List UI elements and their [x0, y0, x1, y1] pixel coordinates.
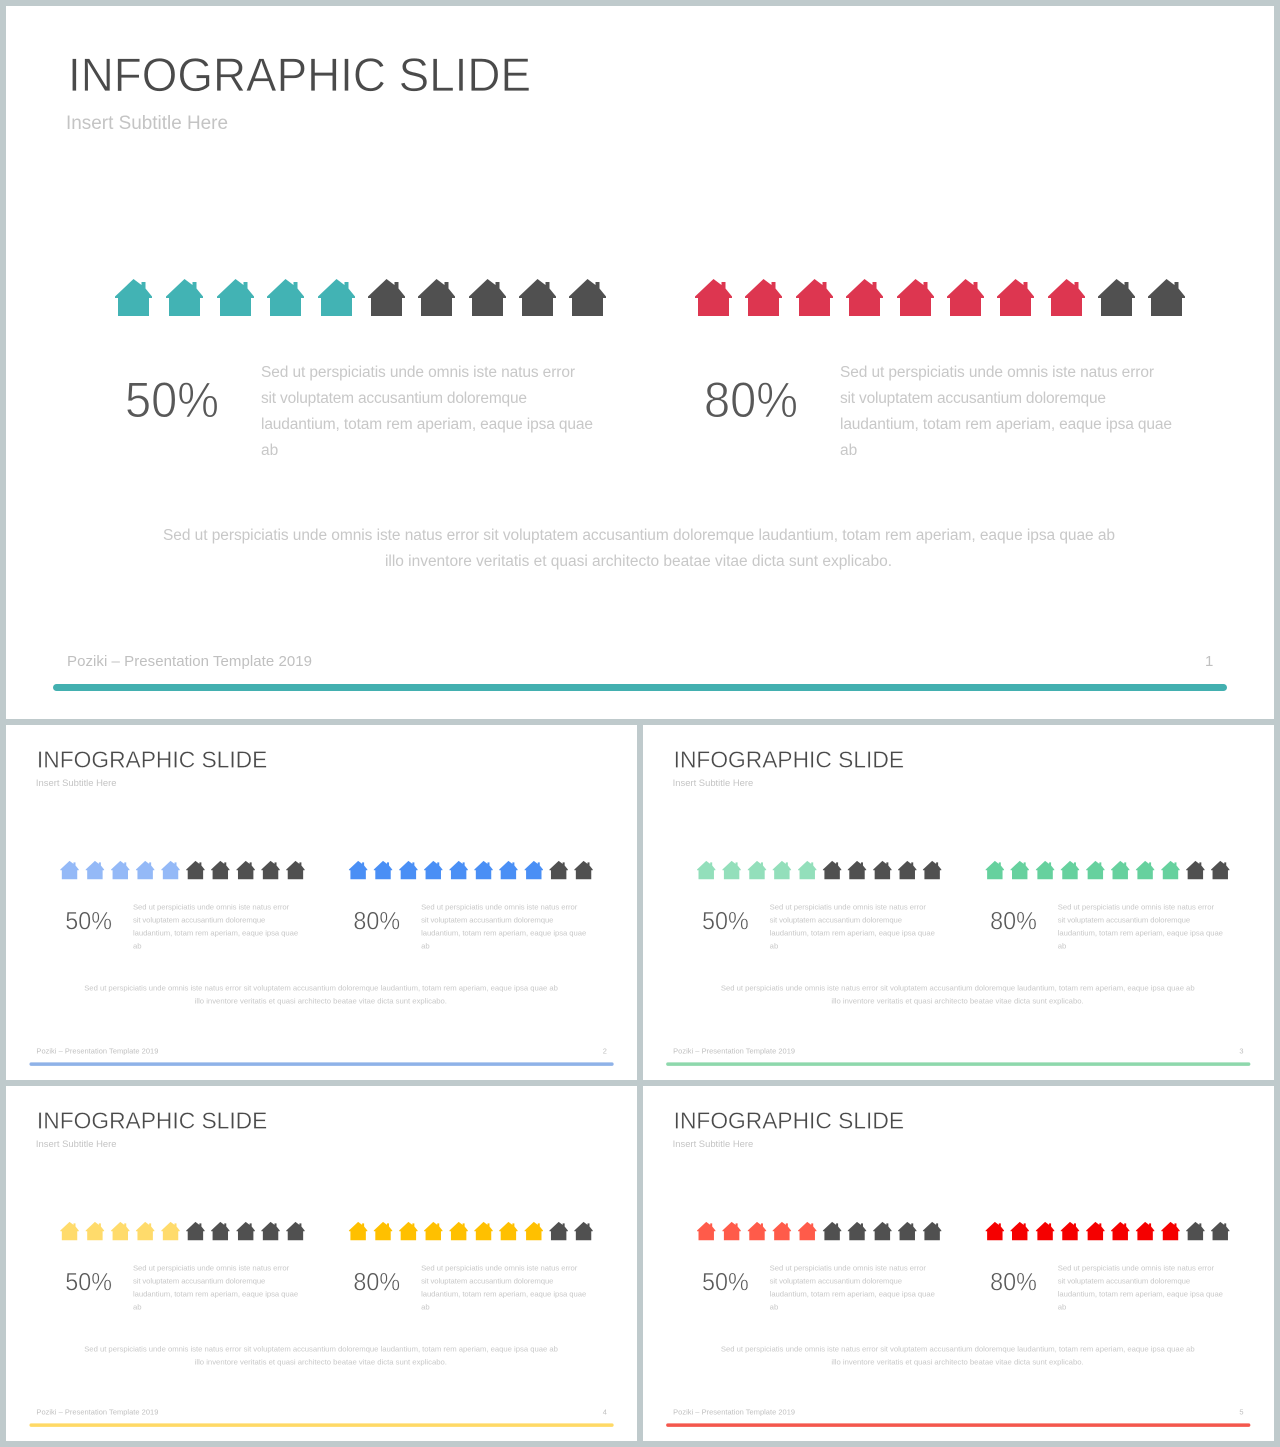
title: INFOGRAPHIC SLIDE	[68, 48, 531, 101]
panel: slide 5 (red)	[643, 1086, 1274, 1441]
footer text: Poziki – Presentation Template 2019	[673, 1407, 795, 1416]
text block: centered summary	[163, 527, 1115, 570]
text block: right description: Sed ut perspiciatis unde omnis iste natus error	[1058, 1264, 1214, 1273]
text block: right description: ab	[1058, 1302, 1066, 1311]
page number: 5	[1239, 1407, 1244, 1416]
text block: centered summary	[84, 1345, 558, 1367]
text block: right description: ab	[421, 1302, 430, 1311]
text block: left description: laudantium, totam rem aperiam, eaque ipsa quae	[133, 928, 298, 937]
icon row: 50 percent houses	[60, 1222, 305, 1240]
icon row: 80 percent houses	[986, 861, 1229, 879]
text block: right description	[421, 903, 586, 950]
text block: right description: laudantium, totam rem aperiam, eaque ipsa quae	[1058, 928, 1223, 937]
panel: slide 1 (teal and crimson)	[6, 6, 1274, 719]
subtitle: Insert Subtitle Here	[673, 1139, 753, 1150]
panel: slide 2 (blue)	[6, 725, 637, 1080]
page number: 2	[603, 1046, 607, 1055]
icon row: 80 percent houses	[695, 279, 1185, 316]
statistic: 80%: 80%	[990, 907, 1037, 935]
text block: right description: sit voluptatem accusantium doloremque	[840, 390, 1106, 407]
text block: left description: ab	[770, 1302, 778, 1311]
text block: left description: sit voluptatem accusantium doloremque	[261, 390, 527, 407]
statistic: 80%: 80%	[353, 1268, 400, 1296]
footer text: Poziki – Presentation Template 2019	[673, 1046, 795, 1055]
text block: right description: ab	[421, 941, 430, 950]
text block: right description: Sed ut perspiciatis unde omnis iste natus error	[840, 364, 1154, 381]
text block: left description: ab	[261, 442, 278, 459]
text block: right description: sit voluptatem accusantium doloremque	[1058, 916, 1190, 925]
footer text: Poziki – Presentation Template 2019	[67, 653, 312, 670]
subtitle: Insert Subtitle Here	[36, 778, 117, 789]
text block: centered summary	[721, 984, 1195, 1006]
footer text: Poziki – Presentation Template 2019	[36, 1407, 158, 1416]
text block: right description: Sed ut perspiciatis unde omnis iste natus error	[1058, 903, 1214, 912]
text block: right description: laudantium, totam rem aperiam, eaque ipsa quae	[1058, 1289, 1223, 1298]
text block: left description: sit voluptatem accusantium doloremque	[133, 1277, 265, 1286]
text block: centered summary: illo inventore veritatis et quasi architecto beatae vitae dicta sunt explicabo.	[831, 1358, 1084, 1367]
text block: left description: sit voluptatem accusantium doloremque	[770, 916, 902, 925]
title: INFOGRAPHIC SLIDE	[37, 746, 267, 772]
panel: slide 3 (green)	[643, 725, 1274, 1080]
text block: right description: laudantium, totam rem aperiam, eaque ipsa quae	[421, 928, 586, 937]
text block: left description: ab	[770, 941, 778, 950]
icon row: 50 percent houses	[697, 1222, 941, 1240]
panel: slide 4 (yellow)	[6, 1086, 637, 1441]
statistic: 50%: 50%	[702, 1268, 749, 1296]
title: INFOGRAPHIC SLIDE	[674, 1107, 904, 1133]
statistic: 80%: 80%	[353, 907, 400, 935]
text block: left description: Sed ut perspiciatis unde omnis iste natus error	[133, 903, 290, 912]
icon row: 80 percent houses	[349, 1222, 593, 1240]
icon row: 50 percent houses	[60, 861, 305, 879]
title: INFOGRAPHIC SLIDE	[674, 746, 904, 772]
text block: centered summary: Sed ut perspiciatis unde omnis iste natus error sit voluptatem accusantium doloremque laudantium, totam rem aperiam, eaque ipsa quae ab	[721, 1345, 1195, 1354]
page number: 4	[603, 1407, 607, 1416]
text block: right description: sit voluptatem accusantium doloremque	[421, 1277, 553, 1286]
text block: left description: Sed ut perspiciatis unde omnis iste natus error	[770, 903, 926, 912]
text block: left description: sit voluptatem accusantium doloremque	[770, 1277, 902, 1286]
text block: right description: sit voluptatem accusantium doloremque	[421, 916, 553, 925]
text block: left description: Sed ut perspiciatis unde omnis iste natus error	[133, 1264, 290, 1273]
icon row: 80 percent houses	[986, 1222, 1229, 1240]
text block: centered summary: illo inventore veritatis et quasi architecto beatae vitae dicta sunt explicabo.	[195, 997, 447, 1006]
text block: centered summary: illo inventore veritatis et quasi architecto beatae vitae dicta sunt explicabo.	[385, 553, 892, 570]
footer bar	[53, 684, 1227, 691]
text block: left description: laudantium, totam rem aperiam, eaque ipsa quae	[770, 1289, 935, 1298]
text block: left description: laudantium, totam rem aperiam, eaque ipsa quae	[770, 928, 935, 937]
statistic: 80%: 80%	[990, 1268, 1037, 1296]
icon row: 80 percent houses	[349, 861, 593, 879]
statistic: 50%: 50%	[125, 372, 219, 428]
text block: right description: Sed ut perspiciatis unde omnis iste natus error	[421, 1264, 578, 1273]
statistic: 80%: 80%	[704, 372, 798, 428]
text block: left description	[770, 903, 935, 950]
text block: centered summary: illo inventore veritatis et quasi architecto beatae vitae dicta sunt explicabo.	[831, 997, 1084, 1006]
text block: left description	[261, 364, 593, 459]
text block: left description: Sed ut perspiciatis unde omnis iste natus error	[770, 1264, 926, 1273]
statistic: 50%: 50%	[702, 907, 749, 935]
text block: left description: laudantium, totam rem aperiam, eaque ipsa quae	[133, 1289, 298, 1298]
text block: right description: laudantium, totam rem aperiam, eaque ipsa quae	[840, 416, 1172, 433]
page number: 3	[1239, 1046, 1244, 1055]
text block: right description: sit voluptatem accusantium doloremque	[1058, 1277, 1190, 1286]
subtitle: Insert Subtitle Here	[36, 1139, 117, 1150]
footer text: Poziki – Presentation Template 2019	[36, 1046, 158, 1055]
title: INFOGRAPHIC SLIDE	[37, 1107, 267, 1133]
footer bar	[666, 1062, 1250, 1066]
subtitle: Insert Subtitle Here	[66, 113, 228, 134]
text block: left description: Sed ut perspiciatis unde omnis iste natus error	[261, 364, 575, 381]
text block: left description: laudantium, totam rem aperiam, eaque ipsa quae	[261, 416, 593, 433]
text block: right description: Sed ut perspiciatis unde omnis iste natus error	[421, 903, 578, 912]
text block: centered summary	[721, 1345, 1195, 1367]
text block: right description	[1058, 903, 1223, 950]
text block: right description	[421, 1264, 586, 1311]
text block: left description	[133, 1264, 298, 1311]
text block: centered summary: illo inventore veritatis et quasi architecto beatae vitae dicta sunt explicabo.	[195, 1358, 447, 1367]
text block: left description	[770, 1264, 935, 1311]
subtitle: Insert Subtitle Here	[673, 778, 753, 789]
text block: centered summary: Sed ut perspiciatis unde omnis iste natus error sit voluptatem accusantium doloremque laudantium, totam rem aperiam, eaque ipsa quae ab	[84, 1345, 558, 1354]
footer bar	[29, 1062, 614, 1066]
footer bar	[29, 1423, 614, 1427]
page number: 1	[1205, 653, 1213, 670]
text block: right description	[840, 364, 1172, 459]
icon row: 50 percent houses	[697, 861, 941, 879]
text block: centered summary: Sed ut perspiciatis unde omnis iste natus error sit voluptatem accusantium doloremque laudantium, totam rem aperiam, eaque ipsa quae ab	[84, 984, 558, 993]
text block: right description	[1058, 1264, 1223, 1311]
text block: right description: laudantium, totam rem aperiam, eaque ipsa quae	[421, 1289, 586, 1298]
text block: left description: ab	[133, 941, 142, 950]
text block: centered summary: Sed ut perspiciatis unde omnis iste natus error sit voluptatem accusantium doloremque laudantium, totam rem aperiam, eaque ipsa quae ab	[721, 984, 1195, 993]
icon row: 50 percent houses	[115, 279, 606, 316]
text block: centered summary: Sed ut perspiciatis unde omnis iste natus error sit voluptatem accusantium doloremque laudantium, totam rem aperiam, eaque ipsa quae ab	[163, 527, 1115, 544]
text block: right description: ab	[840, 442, 857, 459]
text block: right description: ab	[1058, 941, 1066, 950]
text block: centered summary	[84, 984, 558, 1006]
text block: left description	[133, 903, 298, 950]
footer bar	[666, 1423, 1250, 1427]
text block: left description: ab	[133, 1302, 142, 1311]
text block: left description: sit voluptatem accusantium doloremque	[133, 916, 265, 925]
statistic: 50%: 50%	[65, 907, 112, 935]
statistic: 50%: 50%	[65, 1268, 112, 1296]
